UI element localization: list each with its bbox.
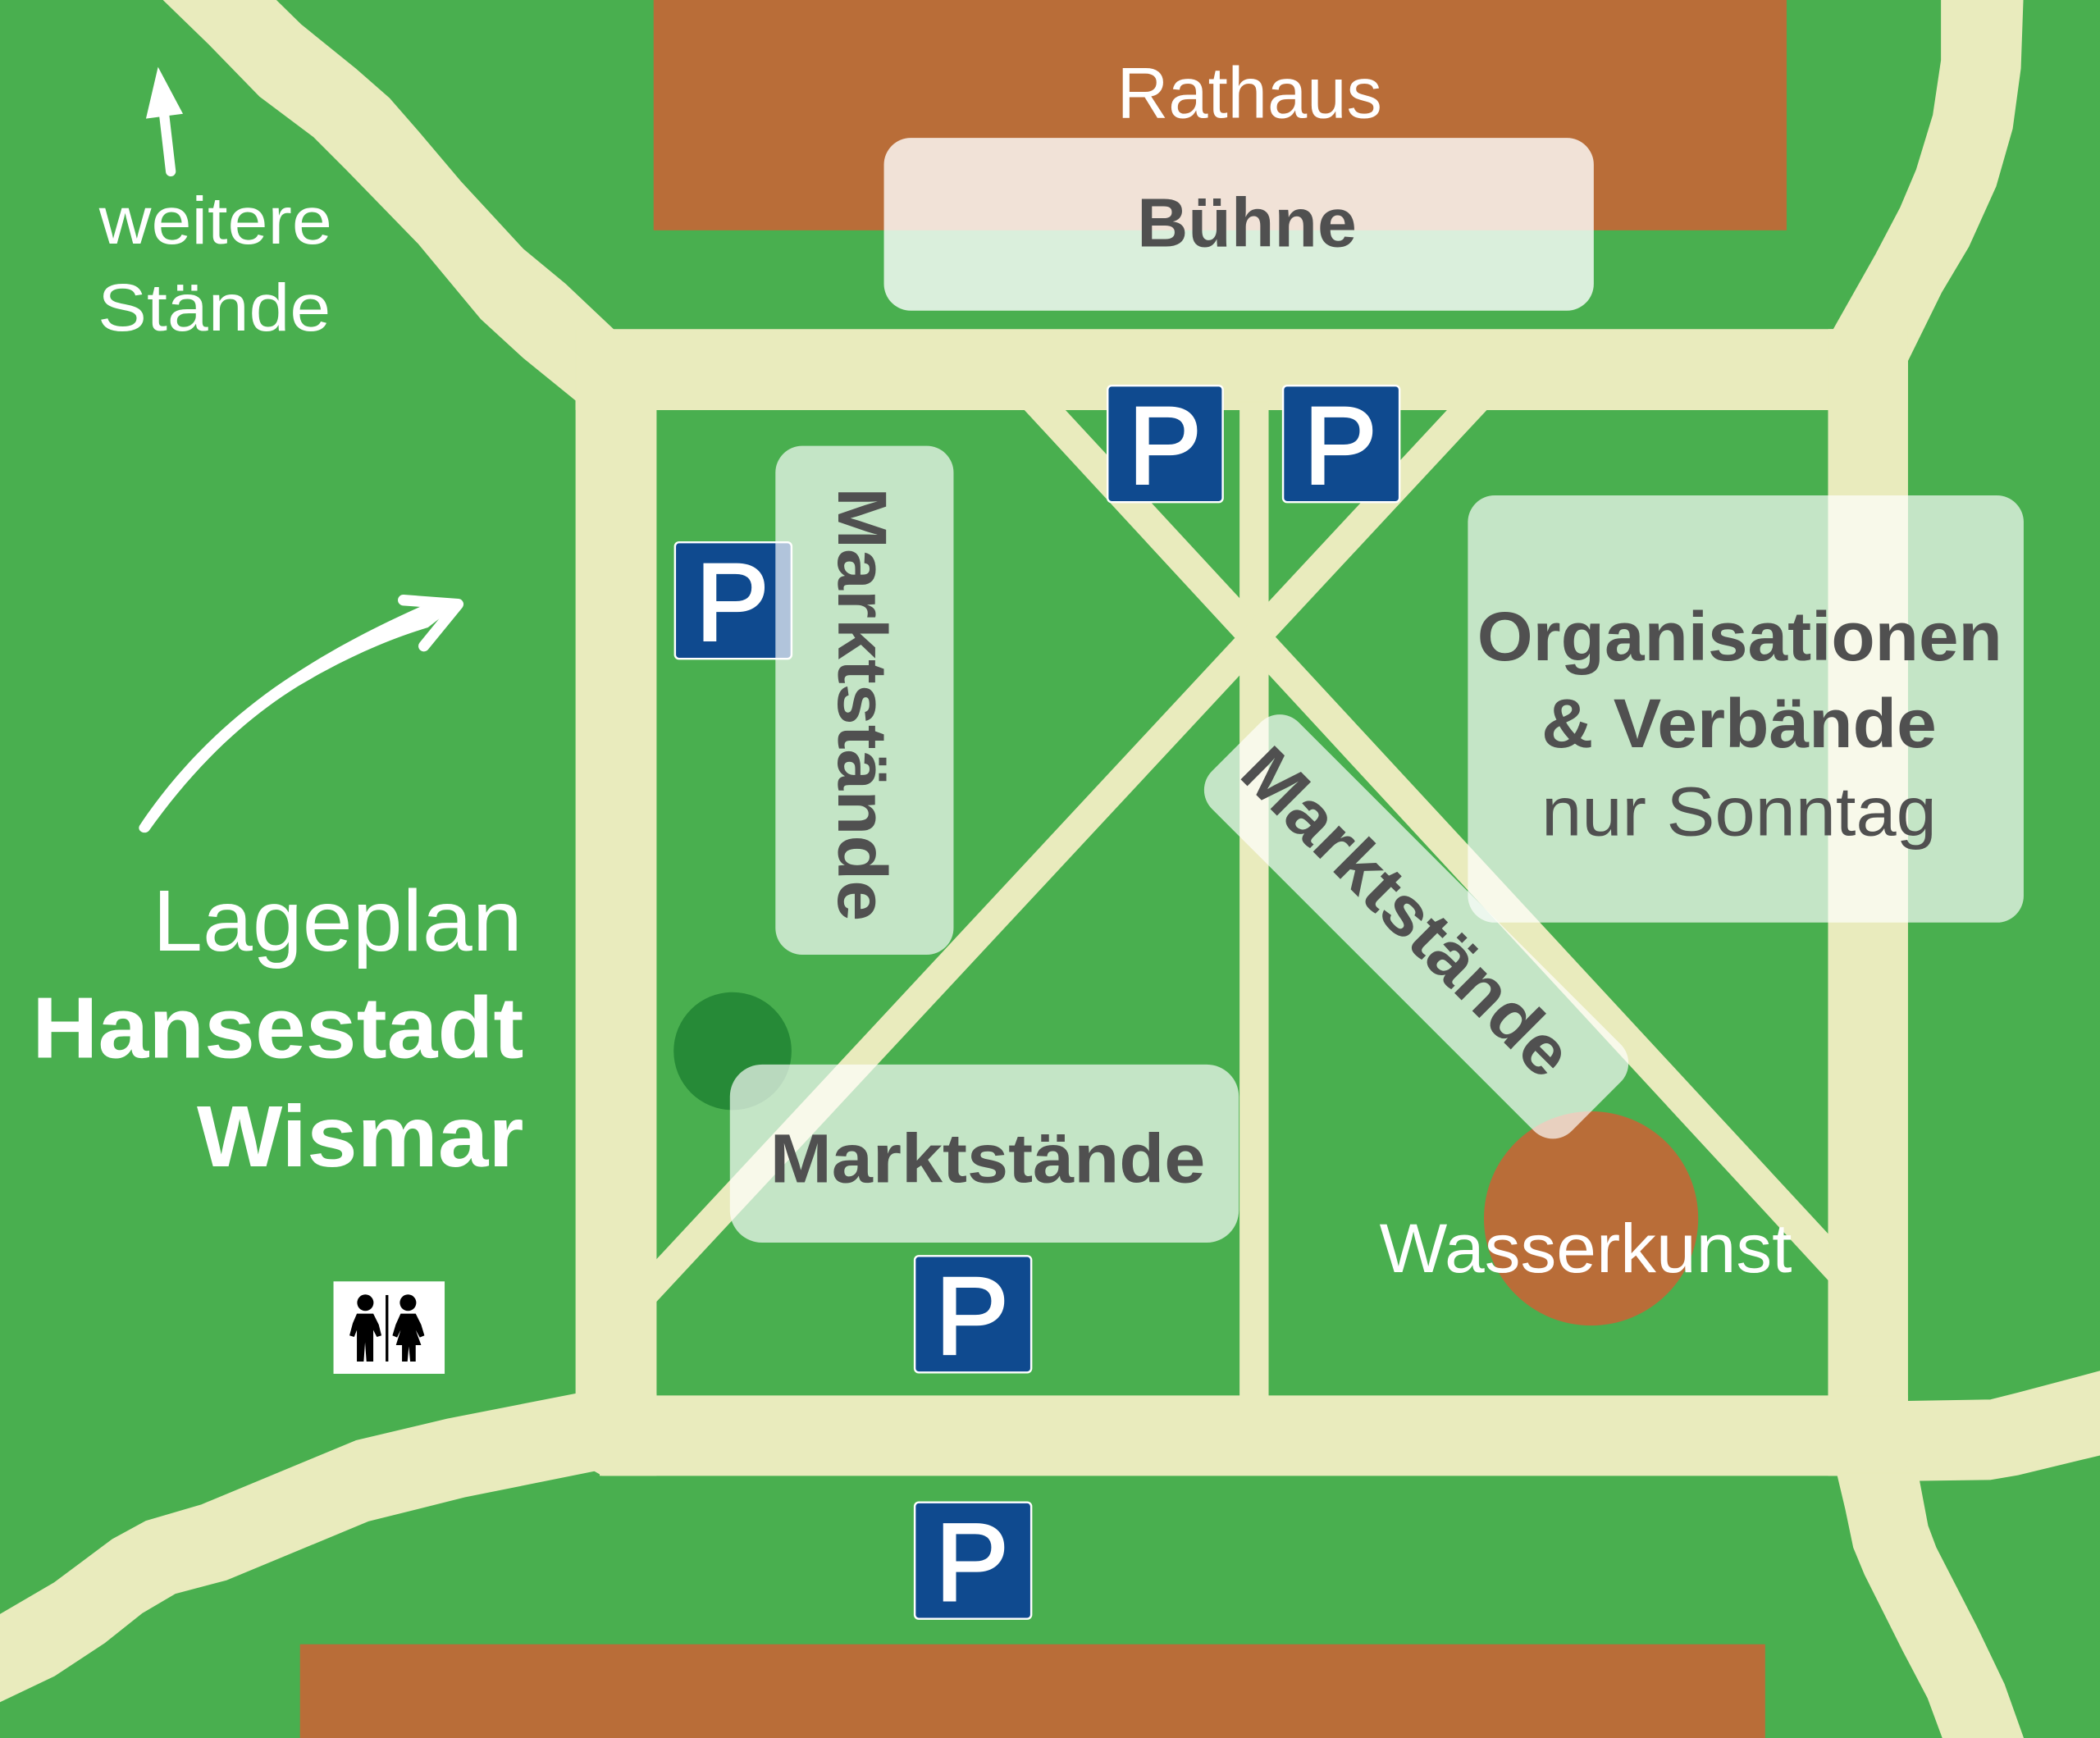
- arrow: curved pointing to market: [139, 600, 458, 833]
- parking sign north right: P: [1303, 385, 1377, 507]
- panel: Organisationen: [1468, 495, 2024, 923]
- parking sign south upper: P: [935, 1255, 1009, 1377]
- label: Marktstände diagonal: Marktstände: [1227, 732, 1588, 1093]
- label: weitere Stände: Stände: [98, 271, 331, 345]
- building: south: [300, 1644, 1765, 1738]
- circle: Wasserkunst: [1484, 1111, 1698, 1325]
- label: Bühne: Bühne: [1137, 183, 1357, 261]
- title: Lageplan Hansestadt Wismar: Hansestadt: [32, 980, 523, 1077]
- label: weitere Stände: [98, 184, 332, 345]
- label: Organisationen & Verbände nur Sonntag: Organisationen: [1477, 597, 2002, 675]
- building: Rathaus: [654, 0, 1787, 230]
- title: Lageplan Hansestadt Wismar: Wismar: [197, 1088, 523, 1185]
- parking sign north left: P: [1129, 385, 1202, 507]
- title: Lageplan Hansestadt Wismar: [32, 873, 523, 1185]
- panel: Marktstände horizontal: [730, 1065, 1239, 1243]
- label: Organisationen & Verbände nur Sonntag: [1477, 597, 2002, 851]
- label: Marktstände vertical: Marktstände: [824, 487, 902, 921]
- label: Marktstände horizontal: Marktstände: [770, 1120, 1205, 1197]
- label: weitere Stände: weitere: [98, 184, 332, 258]
- parking sign north left: [1107, 385, 1223, 507]
- label: Organisationen & Verbände nur Sonntag: & Verbände: [1541, 684, 1937, 762]
- circle: tree: [673, 992, 792, 1110]
- panel: Marktstände vertical: [775, 446, 953, 955]
- parking sign south lower: P: [935, 1502, 1009, 1624]
- title: Lageplan Hansestadt Wismar: Lageplan: [153, 873, 523, 969]
- parking sign west: P: [696, 541, 769, 664]
- parking sign south lower: [915, 1502, 1031, 1624]
- label: Rathaus: Rathaus: [1117, 52, 1382, 134]
- parking sign west: [675, 541, 792, 664]
- parking sign south upper: [915, 1255, 1031, 1377]
- parking sign north right: [1283, 385, 1399, 507]
- label: Wasserkunst: Wasserkunst: [1380, 1209, 1792, 1287]
- label: Organisationen & Verbände nur Sonntag: nur Sonntag: [1541, 773, 1937, 851]
- panel: Marktstände diagonal: [1193, 704, 1640, 1150]
- arrow: north to further stalls: [146, 67, 183, 171]
- panel: Bühne: [884, 138, 1594, 311]
- icon: toilets: [334, 1281, 445, 1374]
